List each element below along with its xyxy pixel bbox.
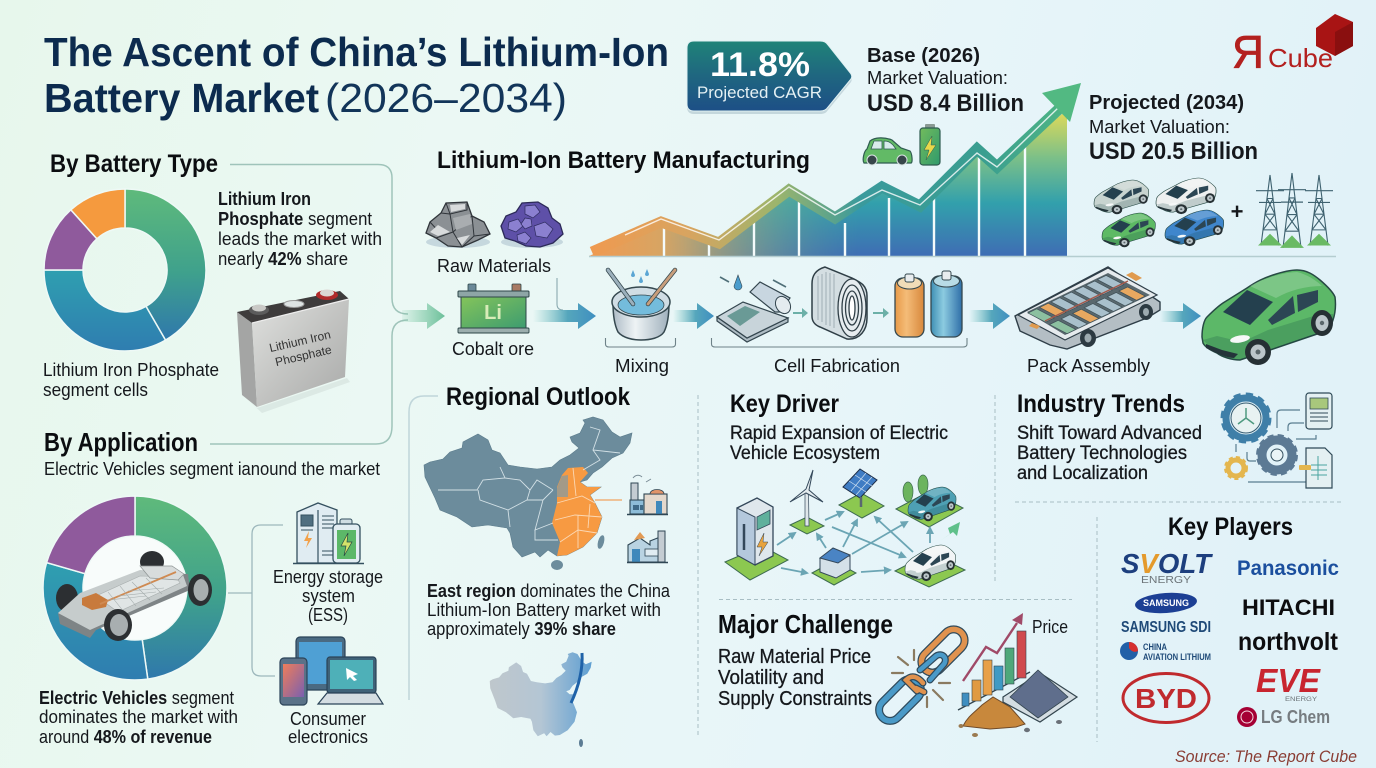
text: energy storage label xyxy=(273,567,383,625)
text: trends detail: Battery Technologies xyxy=(1017,443,1187,464)
projected 2034 valuation: Projected (2034) xyxy=(1089,92,1244,114)
text: mixing: Mixing xyxy=(615,356,669,376)
logo: RCube xyxy=(1232,14,1353,78)
arrow: fabrication to pack xyxy=(969,303,1010,329)
text: east region 39% share xyxy=(427,581,671,639)
CAGR badge: 11.8% xyxy=(710,46,810,84)
donut chart: application xyxy=(43,496,227,680)
text: driver detail: Rapid Expansion of Electric xyxy=(730,423,948,444)
title: The Ascent of China’s Lithium-Ion xyxy=(44,29,669,75)
source note: Source: The Report Cube xyxy=(1175,747,1357,766)
panel: by application xyxy=(39,427,383,747)
text: cell fabrication: Cell Fabrication xyxy=(774,356,900,376)
growth trend chart xyxy=(580,83,1081,270)
logo: Samsung SDI: SAMSUNG xyxy=(1143,598,1189,608)
text: challenge detail: Supply Constraints xyxy=(718,688,872,710)
text: energy storage label: (ESS) xyxy=(308,605,348,625)
heading: major challenge: Major Challenge xyxy=(718,609,893,639)
icon: prismatic battery cell: Lithium Iron xyxy=(268,327,332,355)
arrow: materials to mixing xyxy=(533,303,596,329)
text: cobalt ore: Cobalt ore xyxy=(452,339,534,359)
title: (2026–2034) xyxy=(325,75,567,121)
map: small China shading xyxy=(490,652,592,747)
heading: industry trends: Industry Trends xyxy=(1017,390,1185,418)
arrow: coil to cells xyxy=(873,308,889,318)
text: trends detail: and Localization xyxy=(1017,463,1148,484)
icon: factory top xyxy=(627,475,668,514)
icon: wind turbine xyxy=(790,470,824,534)
text: energy storage label: Energy storage xyxy=(273,567,383,587)
text: consumer electronics label: Consumer xyxy=(290,709,366,729)
text: consumer electronics label: electronics xyxy=(288,727,368,747)
icon: charging station xyxy=(725,498,788,580)
icon: energy storage system xyxy=(293,503,364,564)
base 2026 valuation: USD 8.4 Billion xyxy=(867,90,1024,117)
icon: four electric cars and power towers: + xyxy=(1231,199,1243,224)
bracket: applications xyxy=(228,525,283,676)
panel: regional outlook xyxy=(424,383,671,747)
text: 42% share: Lithium Iron xyxy=(218,189,311,209)
text: consumer electronics label xyxy=(288,709,368,747)
logo: LG Chem: LG Chem xyxy=(1261,707,1330,727)
base 2026 valuation: Base (2026) xyxy=(867,45,980,67)
callout line: east region to factories xyxy=(595,499,622,501)
icon: raw material rocks xyxy=(426,202,563,248)
dashed dividers xyxy=(698,395,1341,742)
text: segment cells: Lithium Iron Phosphate xyxy=(43,360,219,380)
logo: SVOLT Energy: SVOLT xyxy=(1121,548,1214,579)
arrow: roll to coil xyxy=(793,308,808,318)
projected 2034 valuation: Market Valuation: xyxy=(1089,117,1230,137)
icon: electrode roll xyxy=(717,275,794,342)
icon: green growth arrow xyxy=(940,522,960,541)
text: 48% of revenue: Electric Vehicles segment xyxy=(39,688,234,708)
text: 42% share: nearly 42% share xyxy=(218,249,348,269)
text: 42% share: Phosphate segment xyxy=(218,209,372,229)
base 2026 valuation: Market Valuation: xyxy=(867,68,1008,88)
logo: China Aviation Lithium: CHINA xyxy=(1143,642,1167,652)
logo: RCube: Cube xyxy=(1268,43,1333,73)
base 2026 valuation xyxy=(867,45,1024,117)
text: driver detail: Vehicle Ecosystem xyxy=(730,443,880,464)
text: east region 39% share: East region dominates the China xyxy=(427,581,671,601)
panel: industry trends xyxy=(1017,390,1332,488)
text: 48% of revenue: dominates the market with xyxy=(39,707,238,727)
text: challenge detail: Volatility and xyxy=(718,667,824,689)
logo: BYD xyxy=(1123,674,1209,722)
heading: key driver: Key Driver xyxy=(730,390,839,418)
title xyxy=(44,29,669,121)
icon: green electric car xyxy=(1202,270,1335,365)
logo: BYD: BYD xyxy=(1135,683,1197,714)
logo: EVE Energy: ENERGY xyxy=(1285,697,1317,703)
panel: major challenge xyxy=(718,609,1077,737)
icon: car with trees xyxy=(896,475,963,527)
arrow: pack to car xyxy=(1160,303,1201,329)
icon: broken chain xyxy=(875,625,969,725)
icon: battery pack xyxy=(1015,267,1160,349)
text: east region 39% share: Lithium-Ion Battery market with xyxy=(427,600,661,620)
logo: Northvolt: northvolt xyxy=(1238,628,1339,656)
map: China with east region highlighted xyxy=(424,417,632,570)
icon: solar panel xyxy=(839,469,884,518)
logo: Samsung SDI: SAMSUNG SDI xyxy=(1121,619,1211,636)
text: pack assembly: Pack Assembly xyxy=(1027,356,1150,376)
chart baseline xyxy=(589,256,1336,258)
text: 48% of revenue xyxy=(39,688,238,747)
icon: prismatic battery cell xyxy=(237,290,350,413)
icon: EV skateboard chassis xyxy=(56,551,212,641)
arrow: into process xyxy=(402,303,445,329)
donut chart: battery type xyxy=(44,189,206,351)
heading: key players: Key Players xyxy=(1168,513,1293,541)
logo: RCube: Я xyxy=(1232,26,1264,78)
heading: regional outlook: Regional Outlook xyxy=(446,383,630,411)
panel: key players xyxy=(1120,513,1339,727)
bracket: mixing xyxy=(606,338,676,347)
bracket: cell fabrication xyxy=(712,338,967,347)
logo: China Aviation Lithium xyxy=(1120,642,1211,662)
icon: mixing bowl xyxy=(608,269,675,340)
icon: Li battery: Li xyxy=(484,302,502,324)
icon: jelly-roll coil xyxy=(812,267,867,339)
text: segment cells xyxy=(43,360,219,400)
text: trends detail: Shift Toward Advanced xyxy=(1017,423,1202,444)
text: trends detail xyxy=(1017,423,1202,484)
projected 2034 valuation xyxy=(1089,92,1258,165)
icon: price chart and raw piles xyxy=(958,613,1077,737)
heading: manufacturing: Lithium-Ion Battery Manufacturing xyxy=(437,147,810,174)
text: 48% of revenue: around 48% of revenue xyxy=(39,727,212,747)
panel: lithium-ion battery manufacturing xyxy=(402,147,1335,376)
logo: China Aviation Lithium: AVIATION LITHIUM xyxy=(1143,652,1211,662)
arrows: ecosystem links xyxy=(777,512,930,573)
text: price: Price xyxy=(1032,617,1068,637)
logo: EVE Energy: EVE xyxy=(1256,662,1321,699)
text: challenge detail: Raw Material Price xyxy=(718,646,871,668)
icon: consumer electronics xyxy=(280,637,383,705)
logo: Hitachi: HITACHI xyxy=(1242,595,1335,620)
text: application subtitle: Electric Vehicles segment ianound the market xyxy=(44,459,380,479)
process line xyxy=(557,278,563,310)
icon: cylindrical cells xyxy=(895,271,962,337)
CAGR badge: Projected CAGR xyxy=(697,83,822,102)
heading: by battery type: By Battery Type xyxy=(50,150,218,178)
icon: Li battery xyxy=(458,284,529,333)
projected 2034 valuation: USD 20.5 Billion xyxy=(1089,138,1258,165)
diagram: EV ecosystem network xyxy=(725,469,965,587)
text: energy storage label: system xyxy=(302,586,355,606)
icon: house with solar xyxy=(812,548,856,585)
text: driver detail xyxy=(730,423,948,464)
text: challenge detail xyxy=(718,646,872,710)
text: segment cells: segment cells xyxy=(43,380,148,400)
text: 42% share xyxy=(218,189,382,269)
connector lines: left panels to process xyxy=(210,164,438,700)
text: east region 39% share: approximately 39% share xyxy=(427,619,616,639)
panel: key driver xyxy=(725,390,965,587)
text: 42% share: leads the market with xyxy=(218,229,382,249)
icon: factory bottom xyxy=(627,531,668,562)
icon: gears and documents xyxy=(1223,393,1332,488)
arrow: mixing to fabrication xyxy=(673,303,714,329)
icon: small car and battery xyxy=(863,124,940,165)
icon: white car xyxy=(895,545,965,587)
logo: SVOLT Energy: ENERGY xyxy=(1141,575,1191,586)
text: raw materials: Raw Materials xyxy=(437,256,551,276)
panel: by battery type xyxy=(43,150,382,413)
icon: four electric cars and power towers xyxy=(1094,173,1333,248)
logo: Samsung SDI xyxy=(1121,591,1211,636)
heading: by application: By Application xyxy=(44,427,198,457)
icon: prismatic battery cell: Phosphate xyxy=(274,342,333,369)
logo: Panasonic: Panasonic xyxy=(1237,557,1339,580)
CAGR badge xyxy=(687,41,852,114)
logo: LG Chem xyxy=(1237,707,1330,727)
title: Battery Market xyxy=(44,75,319,121)
